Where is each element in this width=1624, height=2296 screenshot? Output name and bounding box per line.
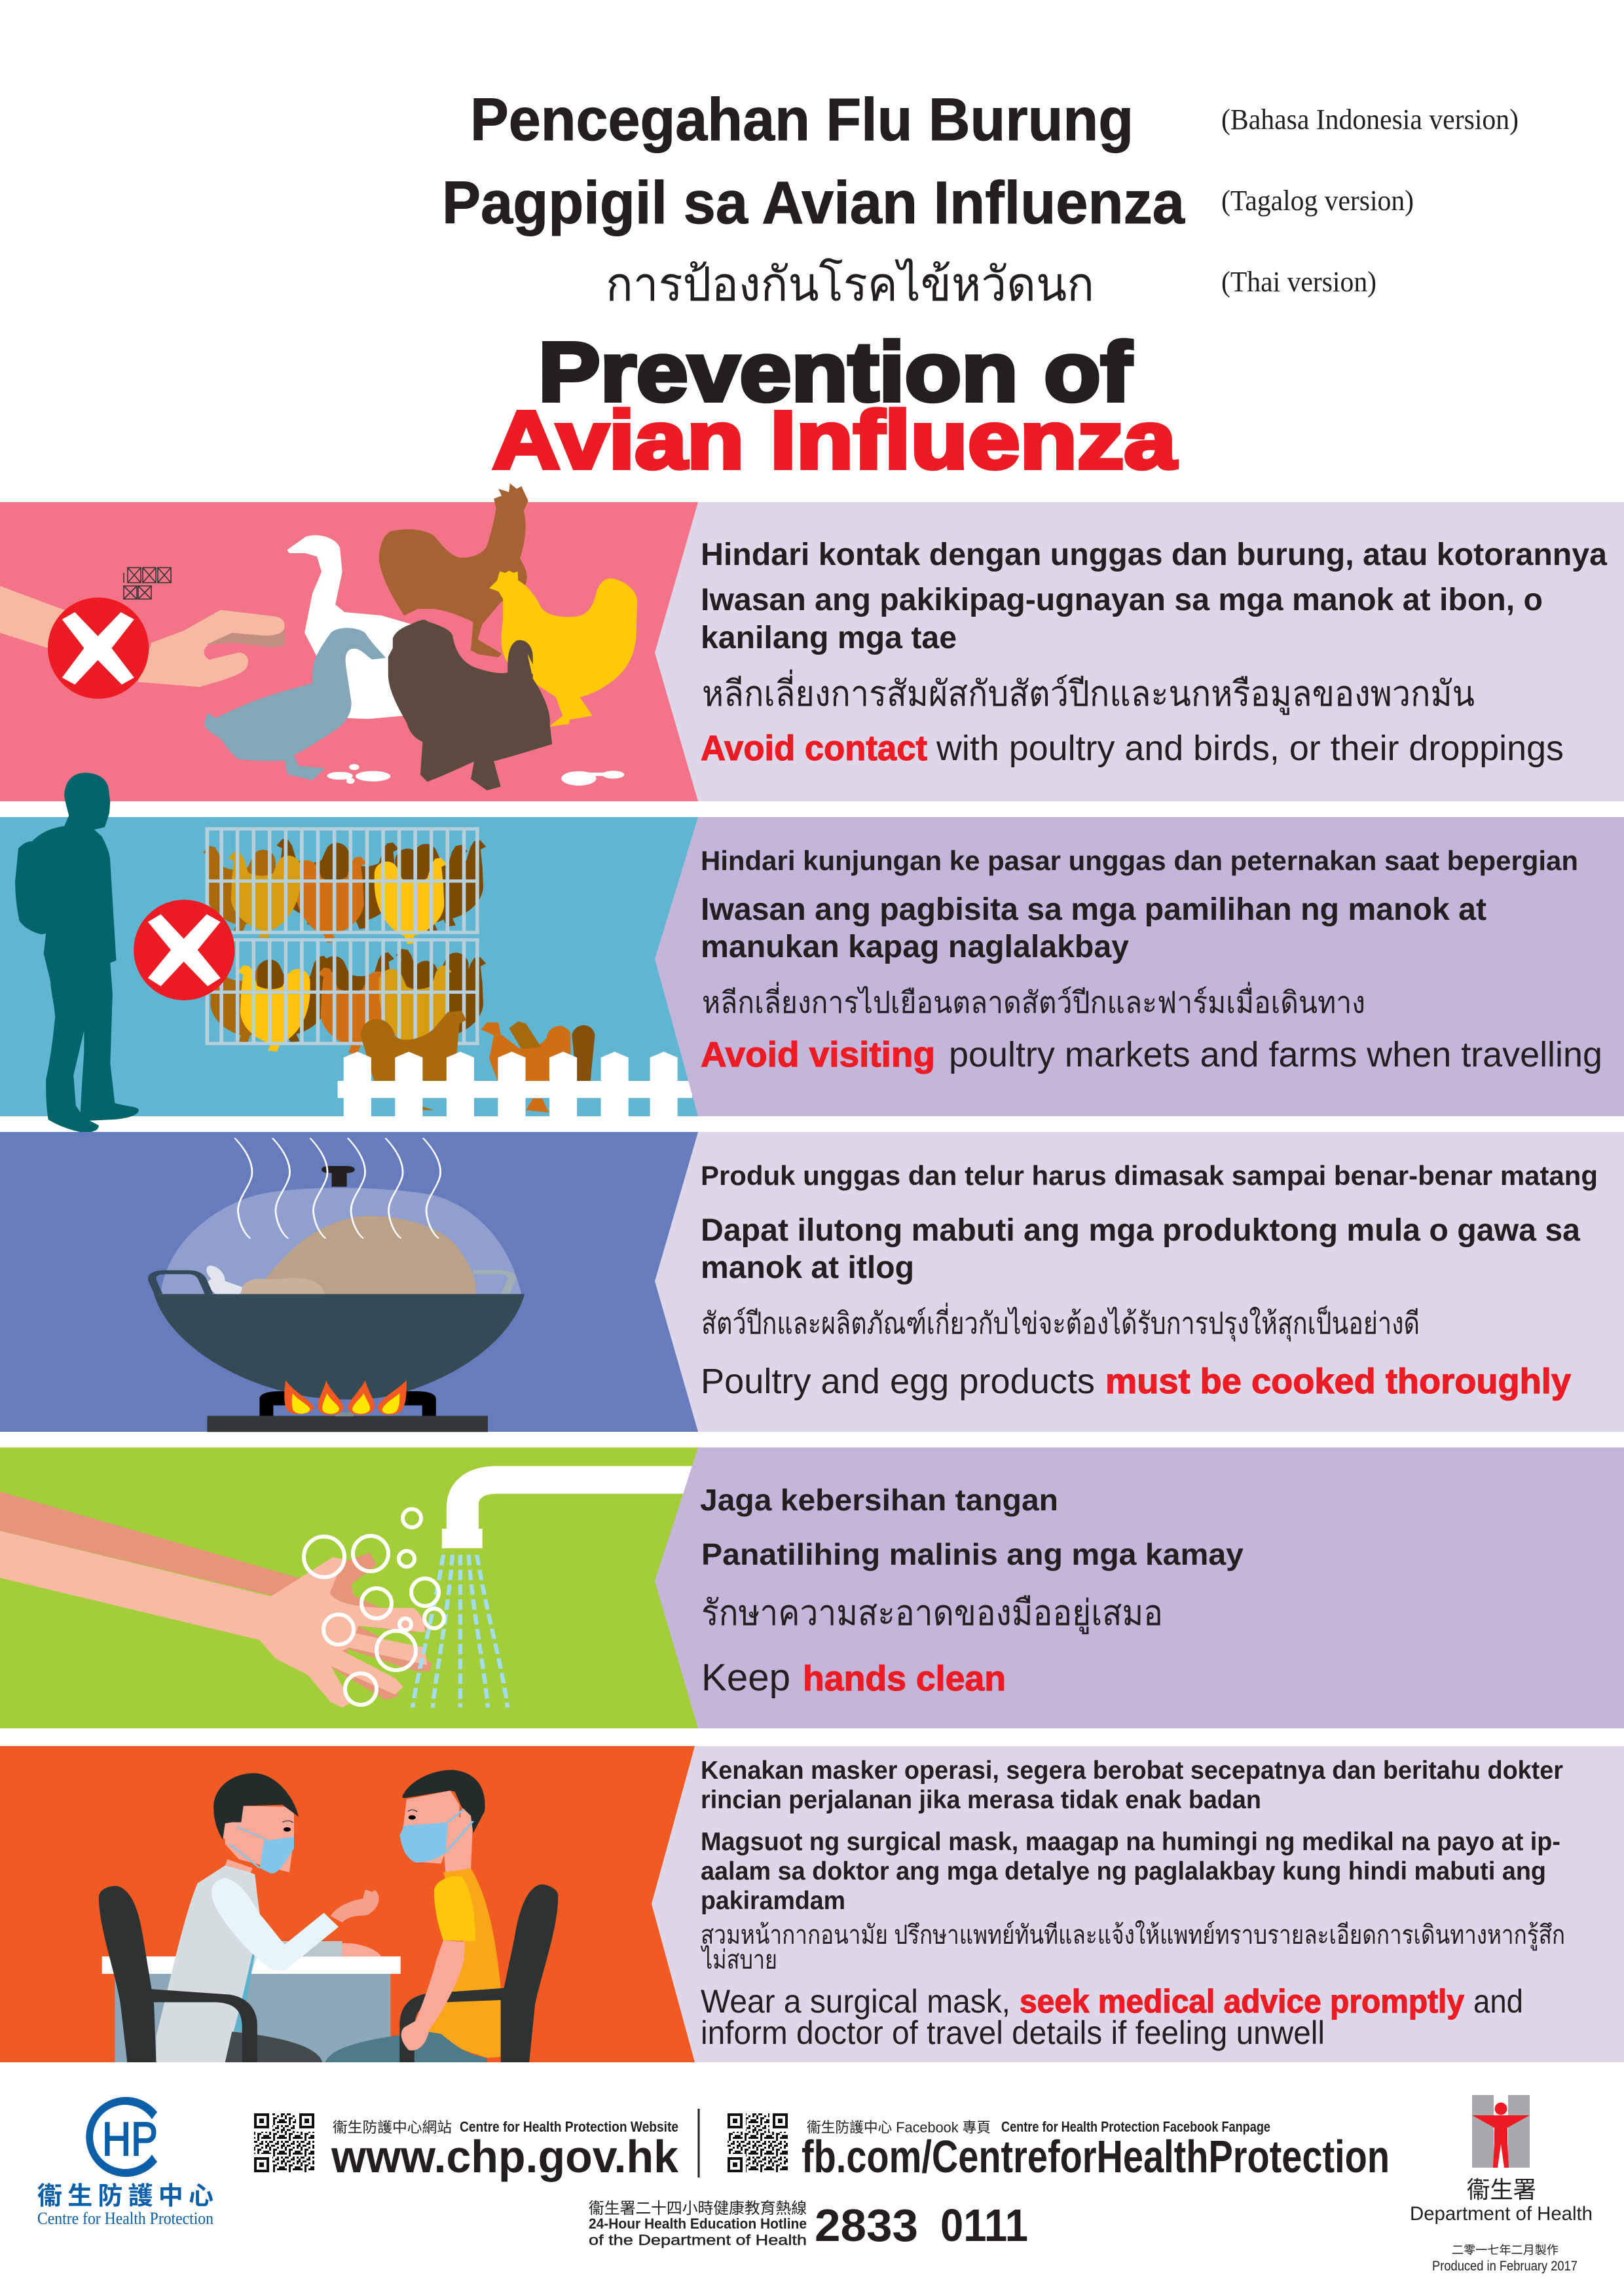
- panel text background: [655, 1448, 1624, 1728]
- panel: seek medical advice: [0, 1746, 1624, 2062]
- English text: [701, 1362, 1571, 1401]
- title: Indonesian: Pencegahan Flu Burung: [470, 86, 1134, 153]
- Tagalog text: pakiramdam: [701, 1887, 845, 1915]
- website label: Centre for Health Protection Website: [460, 2119, 678, 2135]
- header titles: [442, 86, 1519, 486]
- Indonesian text: Kenakan masker operasi, segera berobat secepatnya dan beritahu dokter: [701, 1757, 1563, 1785]
- Facebook label: 衞生防護中心 Facebook 專頁: [807, 2119, 991, 2136]
- lid handle: [322, 1166, 355, 1187]
- footer: [37, 2095, 1593, 2274]
- hotline label: [589, 2200, 807, 2248]
- patient's head and arm: [399, 1770, 485, 2050]
- title: Thai: การป้องกันโรคไข้หวัดนก: [606, 257, 1094, 311]
- illustration: traveller, cages and farm: [15, 773, 692, 1133]
- stray glyph boxes: [124, 568, 171, 599]
- back arm and hand: [0, 1491, 432, 1700]
- panel background: [0, 817, 720, 1116]
- panel text background: [655, 817, 1624, 1116]
- stove base: [207, 1416, 488, 1432]
- illustration: hands under tap: [0, 1466, 693, 1707]
- Tagalog text: manukan kapag naglalakbay: [701, 930, 1129, 964]
- illustration: wok on a stove: [152, 1138, 525, 1432]
- panel: cook thoroughly: [0, 1132, 1624, 1432]
- main title: Prevention of: Prevention of: [538, 325, 1132, 419]
- hotline label: of the Department of Health: [589, 2232, 807, 2248]
- wok: [154, 1294, 525, 1400]
- farm chickens: [361, 1011, 595, 1112]
- Tagalog text: Magsuot ng surgical mask, maagap na humingi ng medikal na payo at ip-: [701, 1828, 1560, 1856]
- cages: [206, 828, 479, 1045]
- Tagalog text: aalam sa doktor ang mga detalye ng paglalakbay kung hindi mabuti ang: [701, 1857, 1546, 1886]
- glass lid: [161, 1188, 521, 1294]
- Indonesian text: Hindari kunjungan ke pasar unggas dan peternakan saat bepergian: [701, 845, 1578, 876]
- arm and hand: [0, 586, 285, 687]
- doctor's chair: [99, 1886, 257, 2062]
- logo: Department of Health: Department of Health: [1410, 2203, 1593, 2225]
- blue duck: [204, 628, 386, 780]
- tap: [442, 1466, 693, 1548]
- language label: Thai: (Thai version): [1221, 266, 1376, 298]
- panel background: [0, 1448, 720, 1728]
- hotline number: 0111: [940, 2200, 1028, 2251]
- Tagalog text: Iwasan ang pakikipag-ugnayan sa mga manok at ibon, o: [701, 583, 1543, 617]
- English text: seek medical advice promptly: [1020, 1983, 1464, 2020]
- water spray: [413, 1555, 507, 1707]
- panel background: [0, 1746, 720, 2062]
- cage chickens: [203, 839, 486, 1054]
- cooked chicken: [204, 1216, 476, 1294]
- Tagalog text: [701, 583, 1543, 655]
- hotline number: 2833: [815, 2200, 918, 2251]
- English text: Avoid contact: [701, 729, 927, 768]
- right pan handle: [473, 1272, 511, 1294]
- fence: [338, 1051, 692, 1116]
- Tagalog text: [701, 892, 1486, 964]
- illustration: hand and poultry: [0, 483, 637, 790]
- production date: Produced in February 2017: [1432, 2259, 1578, 2274]
- website label: [333, 2119, 678, 2136]
- flames: [284, 1380, 407, 1415]
- desk: [102, 1956, 401, 2062]
- yellow hen: [489, 571, 637, 727]
- panel background: [0, 1132, 720, 1432]
- illustration: doctor and patient: [99, 1770, 558, 2062]
- QR code: website: [254, 2113, 314, 2172]
- turkey: [388, 620, 552, 790]
- Facebook URL: fb.com/CentreforHealthProtection: [802, 2131, 1390, 2182]
- English text: inform doctor of travel details if feeling unwell: [701, 2014, 1325, 2051]
- panel background: [0, 502, 720, 801]
- QR code: Facebook: [728, 2113, 788, 2172]
- Tagalog text: Iwasan ang pagbisita sa mga pamilihan ng manok at: [701, 892, 1486, 927]
- Facebook label: Centre for Health Protection Facebook Fanpage: [1001, 2119, 1270, 2135]
- hotline label: 24-Hour Health Education Hotline: [589, 2215, 807, 2232]
- panel text background: [655, 502, 1624, 801]
- stove stand: [259, 1391, 436, 1416]
- Thai text: ไม่สบาย: [701, 1945, 777, 1975]
- doctor: [157, 1773, 381, 2062]
- steam: [234, 1138, 441, 1239]
- English text: Keep: [701, 1656, 790, 1699]
- prohibition sign: [48, 598, 149, 699]
- logo: Centre for Health Protection: HP: [102, 2113, 158, 2166]
- English text: must be cooked thoroughly: [1105, 1362, 1571, 1401]
- Tagalog text: Panatilihing malinis ang mga kamay: [701, 1537, 1244, 1571]
- title: Tagalog: Pagpigil sa Avian Influenza: [442, 170, 1185, 236]
- English text: Avoid visiting: [701, 1035, 935, 1074]
- hotline label: 衞生署二十四小時健康教育熱線: [589, 2200, 807, 2217]
- website label: 衞生防護中心網站: [333, 2119, 452, 2136]
- Thai text: [701, 1920, 1565, 1975]
- Thai text: หลีกเลี่ยงการไปเยือนตลาดสัตว์ปีกและฟาร์มเมื่อเดินทาง: [702, 981, 1365, 1019]
- logo: Centre for Health Protection: [37, 2097, 213, 2228]
- Indonesian text: Produk unggas dan telur harus dimasak sampai benar-benar matang: [701, 1160, 1598, 1191]
- production date: [1432, 2244, 1578, 2274]
- Thai text: สัตว์ปีกและผลิตภัณฑ์เกี่ยวกับไข่จะต้องได้รับการปรุงให้สุกเป็นอย่างดี: [701, 1302, 1420, 1342]
- panel: avoid contact: [0, 483, 1624, 801]
- production date: 二零一七年二月製作: [1452, 2244, 1559, 2257]
- Tagalog text: Dapat ilutong mabuti ang mga produktong mula o gawa sa: [701, 1213, 1580, 1248]
- logo: Department of Health: [1410, 2095, 1593, 2225]
- panel text background: [655, 1132, 1624, 1432]
- Indonesian text: rincian perjalanan jika merasa tidak enak badan: [701, 1786, 1261, 1814]
- prohibition sign: [134, 900, 234, 1000]
- English text: [701, 1656, 1006, 1699]
- rooster: [379, 483, 528, 657]
- English text: with poultry and birds, or their droppings: [936, 729, 1564, 768]
- white goose: [287, 535, 411, 719]
- front arm and hand: [0, 1531, 427, 1707]
- English text: poultry markets and farms when travelling: [949, 1035, 1602, 1074]
- soap bubbles: [304, 1509, 444, 1705]
- Thai text: รักษาความสะอาดของมืออยู่เสมอ: [701, 1594, 1163, 1634]
- left pan handle: [152, 1272, 209, 1294]
- language label: Bahasa Indonesia: (Bahasa Indonesia version): [1221, 103, 1519, 136]
- English text: Wear a surgical mask,: [701, 1983, 1010, 2020]
- Tagalog text: manok at itlog: [701, 1250, 914, 1285]
- Tagalog text: [701, 1213, 1580, 1285]
- Facebook label: [807, 2119, 1270, 2136]
- logo: Centre for Health Protection: 衞生防護中心: [37, 2183, 213, 2210]
- English text: [701, 1983, 1523, 2051]
- English text: hands clean: [803, 1659, 1006, 1698]
- Indonesian text: Hindari kontak dengan unggas dan burung, atau kotorannya: [701, 538, 1607, 572]
- Tagalog text: kanilang mga tae: [701, 621, 957, 655]
- Indonesian text: [701, 1757, 1563, 1814]
- patient's chair: [399, 1884, 558, 2062]
- traveller silhouette: [15, 773, 139, 1133]
- language label: Tagalog: (Tagalog version): [1221, 185, 1414, 217]
- English text: and: [1473, 1983, 1523, 2020]
- Thai text: หลีกเลี่ยงการสัมผัสกับสัตว์ปีกและนกหรือมูลของพวกมัน: [702, 669, 1475, 715]
- Tagalog text: [701, 1828, 1560, 1915]
- main title: Avian Influenza: Avian Influenza: [492, 395, 1177, 486]
- logo: Centre for Health Protection: Centre for Health Protection: [37, 2209, 213, 2228]
- panel: avoid visiting: [0, 773, 1624, 1133]
- logo: Department of Health: 衞生署: [1467, 2176, 1536, 2203]
- website URL: www.chp.gov.hk: [331, 2131, 678, 2182]
- hotline number: [815, 2200, 1028, 2251]
- panel text background: [652, 1746, 1624, 2062]
- patient: [325, 1815, 501, 2062]
- English text: Poultry and egg products: [701, 1362, 1095, 1401]
- panel: hand hygiene: [0, 1448, 1624, 1728]
- droppings: [327, 764, 624, 786]
- Indonesian text: Jaga kebersihan tangan: [700, 1483, 1058, 1517]
